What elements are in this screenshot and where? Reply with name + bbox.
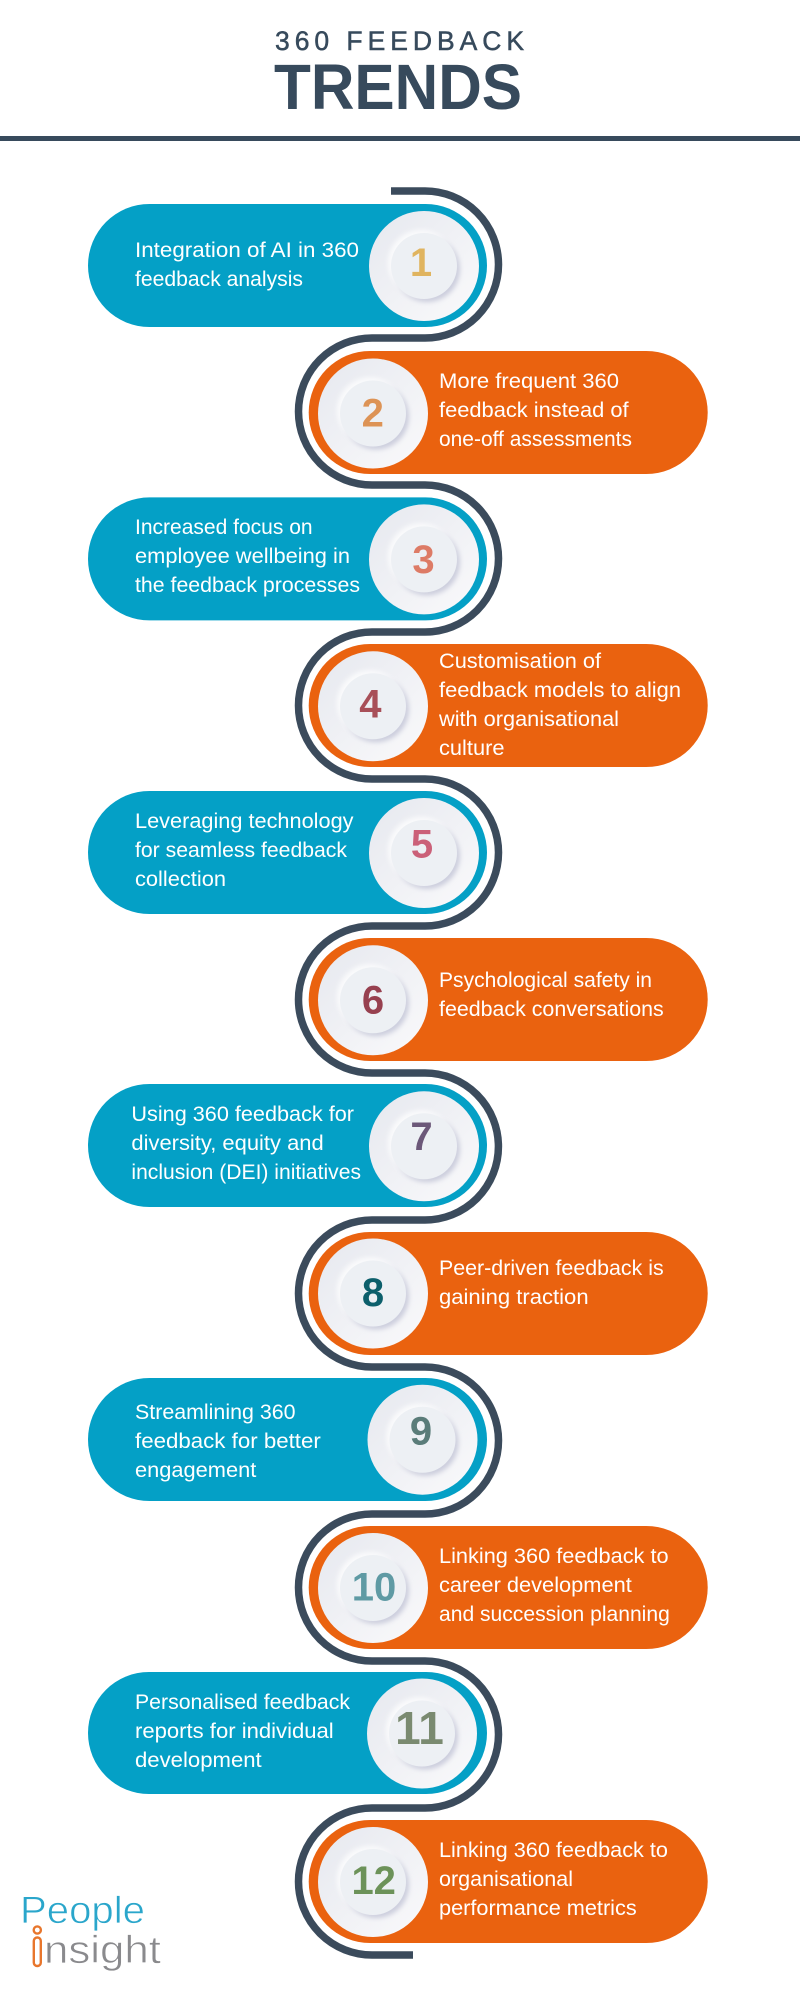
- text: feedback models to align: [439, 679, 681, 702]
- number disc: [368, 1385, 478, 1495]
- text: feedback analysis: [135, 268, 303, 291]
- number disc: [367, 1678, 477, 1788]
- text: Leveraging technology: [135, 810, 354, 833]
- pill: [88, 497, 487, 620]
- text: with organisational: [438, 708, 619, 731]
- pill: [88, 1084, 487, 1207]
- number: 1: [410, 241, 432, 285]
- number disc: [318, 1533, 428, 1643]
- winding connector path: [298, 191, 498, 1955]
- pill: [309, 1820, 708, 1943]
- panel: trend 10: [309, 1526, 708, 1649]
- pill: [88, 1672, 487, 1794]
- text: Linking 360 feedback to: [439, 1839, 668, 1862]
- number: 6: [362, 978, 384, 1022]
- title line: trends: TRENDS: [274, 51, 522, 123]
- panel: trend 9: [88, 1378, 487, 1501]
- panel: trend 8: [309, 1232, 708, 1355]
- header rule: [0, 136, 800, 141]
- panel: trend 11: [88, 1672, 487, 1794]
- number: 9: [410, 1409, 432, 1453]
- number disc: [318, 1238, 428, 1348]
- text: feedback conversations: [439, 998, 664, 1021]
- text: collection: [135, 868, 226, 891]
- number disc: [369, 798, 479, 908]
- pill: [309, 938, 708, 1061]
- number disc: [369, 211, 479, 321]
- number: 12: [351, 1859, 396, 1903]
- pill: [88, 1378, 487, 1501]
- text: performance metrics: [439, 1897, 637, 1920]
- text: Peer-driven feedback is: [439, 1257, 664, 1280]
- text: Using 360 feedback for: [131, 1103, 354, 1126]
- number disc: [318, 651, 428, 761]
- text: career development: [439, 1574, 632, 1597]
- panel: trend 1: [88, 204, 487, 327]
- text: culture: [439, 737, 504, 760]
- logo: People Insight: [20, 1890, 161, 1972]
- logo word: People: People: [20, 1890, 145, 1932]
- text: Increased focus on: [135, 516, 313, 539]
- pill: [309, 644, 708, 767]
- title line: 360 feedback: 360 FEEDBACK: [275, 26, 524, 56]
- panel: trend 3: [88, 497, 487, 620]
- panel: trend 12: [309, 1820, 708, 1943]
- text: the feedback processes: [135, 574, 360, 597]
- text: engagement: [135, 1459, 256, 1482]
- text: Psychological safety in: [439, 969, 652, 992]
- number disc: [318, 945, 428, 1055]
- number disc: [318, 1827, 428, 1937]
- number: 5: [411, 823, 433, 867]
- text: Integration of AI in 360: [135, 239, 359, 262]
- number: 3: [412, 538, 435, 582]
- text: one-off assessments: [439, 428, 632, 451]
- number: 4: [359, 682, 382, 726]
- number disc: [369, 1091, 479, 1201]
- text: organisational: [439, 1868, 573, 1891]
- panel: trend 4: [309, 644, 708, 767]
- text: gaining traction: [439, 1286, 589, 1309]
- panel: trend 2: [309, 351, 708, 474]
- text: Personalised feedback: [135, 1691, 350, 1714]
- panel: trend 6: [309, 938, 708, 1061]
- panel: trend 5: [88, 791, 487, 914]
- panel: trend 7: [88, 1084, 487, 1207]
- logo icon: orange i: [34, 1926, 41, 1966]
- text: inclusion (DEI) initiatives: [131, 1161, 361, 1184]
- logo word: nsight: nsight: [44, 1929, 161, 1972]
- pill: [88, 204, 487, 327]
- number: 2: [362, 392, 384, 436]
- number: 7: [410, 1115, 433, 1159]
- number disc: [369, 504, 479, 614]
- text: More frequent 360: [439, 370, 619, 393]
- text: for seamless feedback: [135, 839, 347, 862]
- text: employee wellbeing in: [135, 545, 350, 568]
- text: development: [135, 1749, 262, 1772]
- number: 8: [362, 1271, 384, 1315]
- pill: [309, 1526, 708, 1649]
- text: and succession planning: [439, 1603, 670, 1626]
- pill: [309, 351, 708, 474]
- text: Linking 360 feedback to: [439, 1545, 669, 1568]
- pill: [309, 1232, 708, 1355]
- text: Streamlining 360: [135, 1401, 296, 1424]
- text: reports for individual: [135, 1720, 334, 1743]
- text: feedback for better: [135, 1430, 321, 1453]
- text: feedback instead of: [439, 399, 629, 422]
- text: Customisation of: [439, 650, 601, 673]
- text: diversity, equity and: [131, 1132, 324, 1155]
- number: 10: [352, 1566, 396, 1610]
- pill: [88, 791, 487, 914]
- number disc: [318, 358, 428, 468]
- title: [274, 26, 524, 123]
- number: 11: [395, 1702, 444, 1754]
